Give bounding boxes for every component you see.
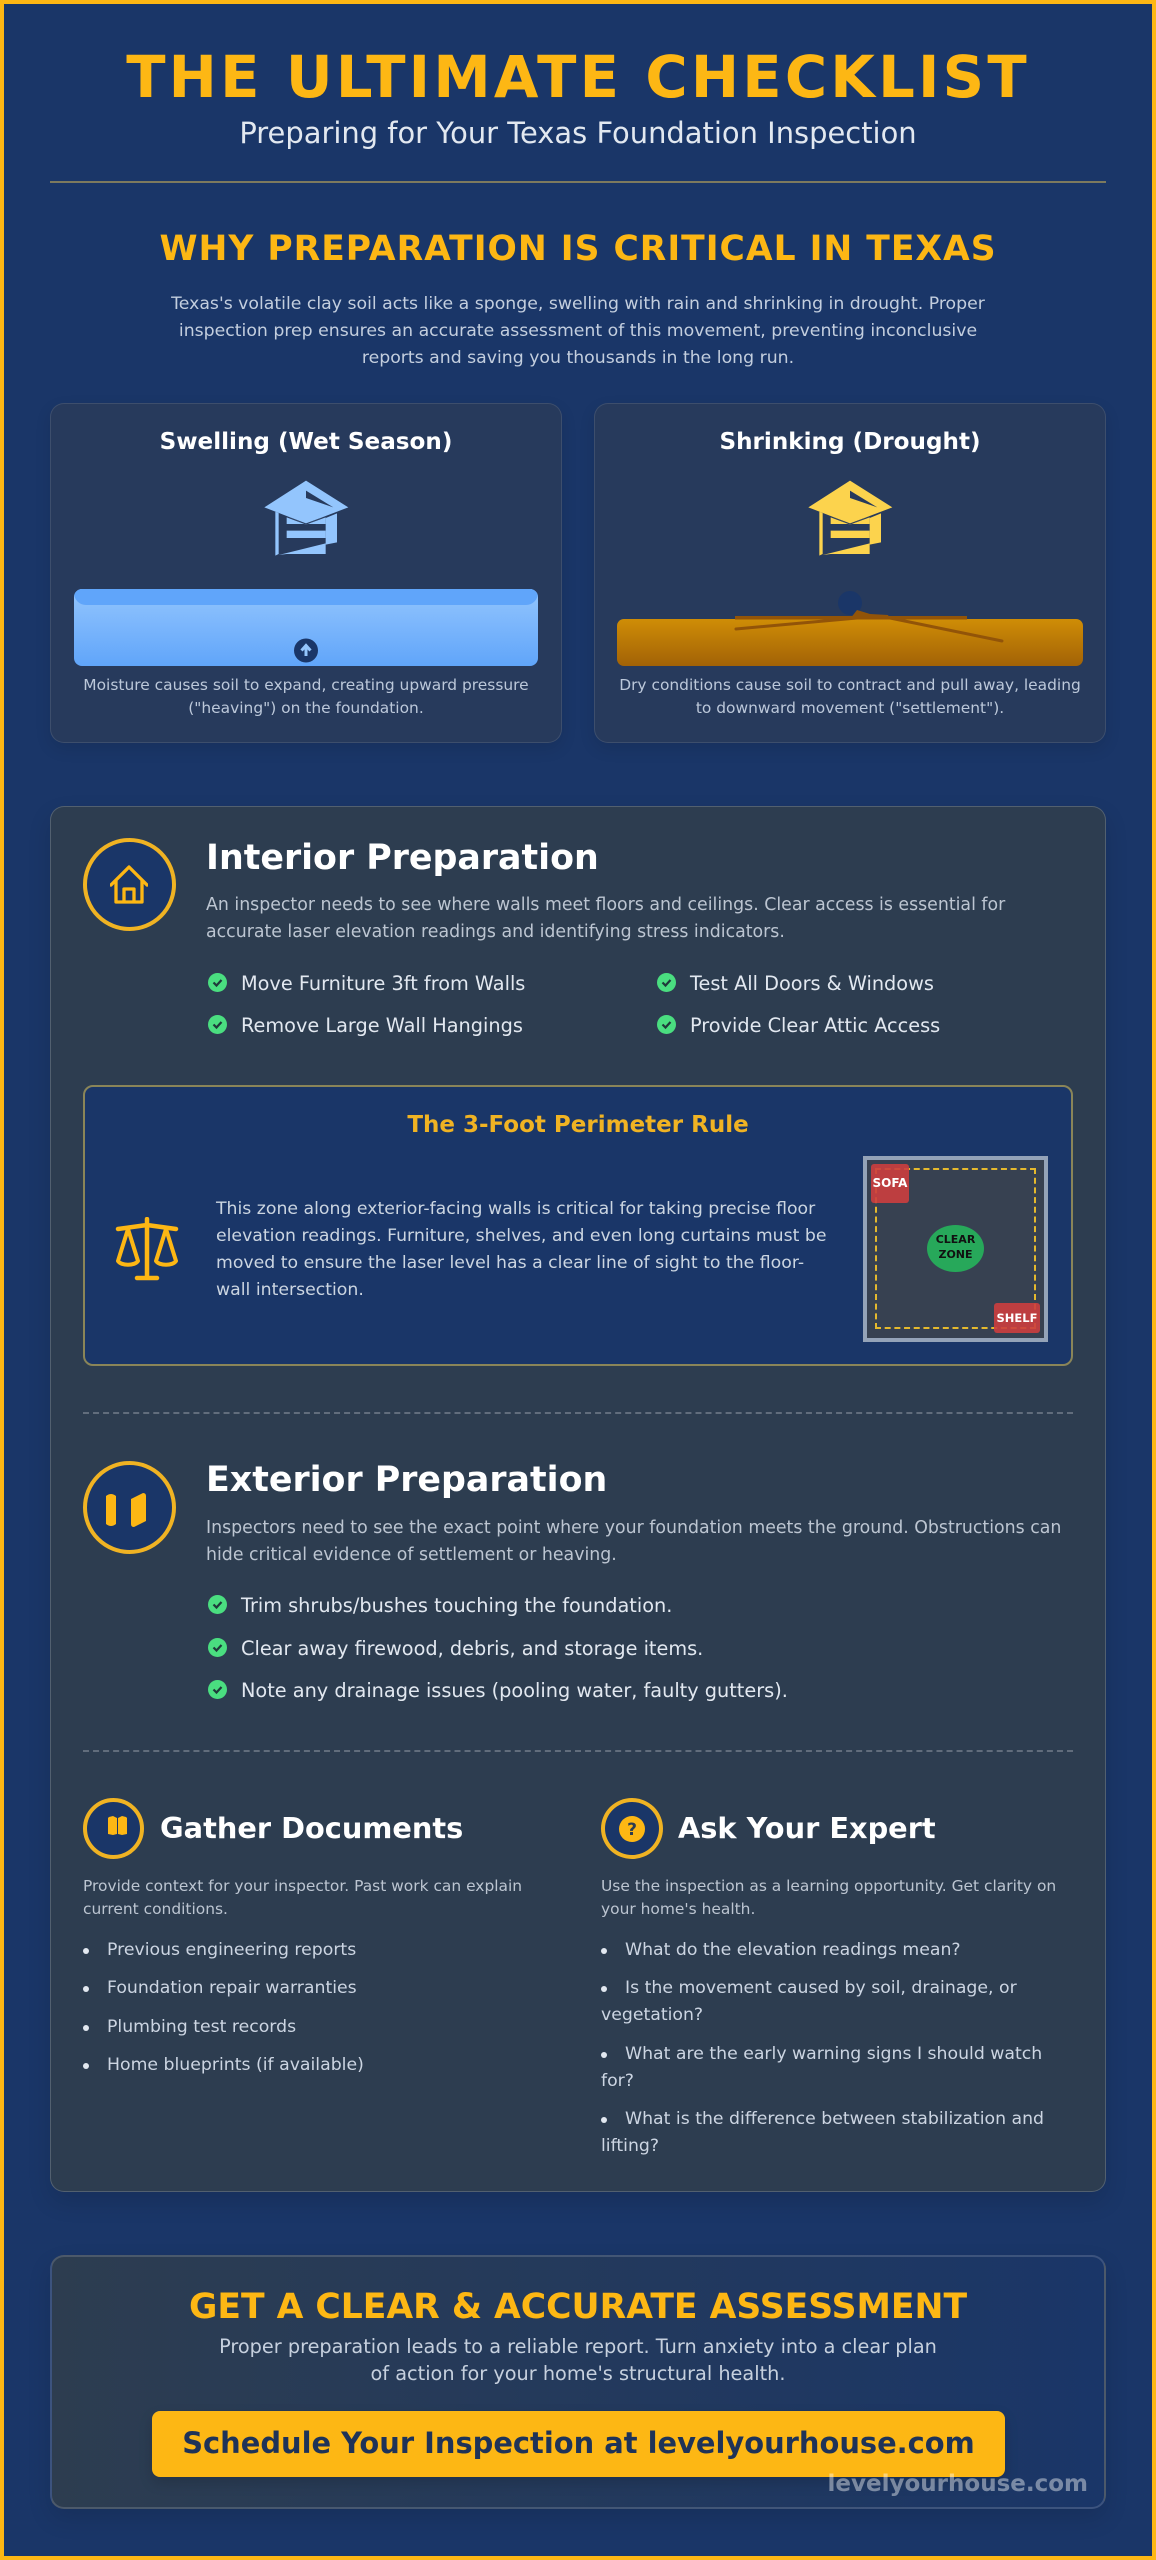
check item: Provide Clear Attic Access [690, 1014, 940, 1037]
intro paragraph [171, 294, 985, 368]
soil bar, dry with cracks [617, 591, 1083, 666]
icon: question [601, 1798, 663, 1859]
shrinking caption: Dry conditions cause soil to contract and pull away, leading [619, 676, 1081, 694]
swelling heading: Swelling (Wet Season) [160, 429, 452, 455]
rule description [216, 1199, 826, 1300]
rule description: moved to ensure the laser level has a clear line of sight to the floor- [216, 1253, 804, 1273]
watermark: levelyourhouse.com [828, 2471, 1088, 2497]
interior description: An inspector needs to see where walls meet floors and ceilings. Clear access is essential for [206, 895, 1005, 915]
cta paragraph: of action for your home's structural health. [370, 2362, 785, 2385]
icon: up arrow [294, 638, 318, 662]
intro paragraph: Texas's volatile clay soil acts like a sponge, swelling with rain and shrinking in drought. Proper [171, 294, 985, 314]
list item: Plumbing test records [107, 2017, 296, 2037]
swelling caption: ("heaving") on the foundation. [188, 699, 424, 717]
heading: gather documents: Gather Documents [160, 1811, 463, 1845]
list item: for? [601, 2071, 634, 2091]
shrinking caption [619, 676, 1081, 717]
icon: house, shrinking [808, 480, 892, 556]
clear zone [927, 1225, 984, 1272]
clear perimeter [875, 1168, 1036, 1329]
icon: exterior [83, 1461, 176, 1554]
list item [601, 1978, 1017, 2025]
documents description: current conditions. [83, 1900, 228, 1918]
icon: house, swelling [264, 480, 348, 556]
shrinking caption: to downward movement ("settlement"). [696, 699, 1004, 717]
list item [601, 2109, 1044, 2156]
header divider [50, 181, 1106, 183]
clear zone: ZONE [938, 1248, 973, 1261]
rule description: This zone along exterior-facing walls is critical for taking precise floor [216, 1199, 815, 1219]
exterior checklist [208, 1594, 788, 1702]
expert list [601, 1940, 1044, 2156]
panel: shrinking [594, 403, 1106, 743]
cta paragraph [219, 2335, 937, 2385]
list item: Home blueprints (if available) [107, 2055, 364, 2075]
icon: scales [116, 1217, 178, 1280]
swelling caption [83, 676, 529, 717]
interior checklist [208, 972, 940, 1037]
heading: exterior preparation: Exterior Preparation [206, 1460, 607, 1500]
list item: vegetation? [601, 2005, 703, 2025]
cta heading: GET A CLEAR & ACCURATE ASSESSMENT [189, 2287, 967, 2327]
expert description: your home's health. [601, 1900, 755, 1918]
documents description: Provide context for your inspector. Past work can explain [83, 1877, 522, 1895]
documents description [83, 1877, 522, 1918]
interior description [206, 895, 1006, 942]
check item: Clear away firewood, debris, and storage items. [241, 1637, 703, 1660]
rule heading: The 3-Foot Perimeter Rule [407, 1112, 749, 1138]
sofa [871, 1164, 909, 1203]
title: THE ULTIMATE CHECKLIST [126, 44, 1030, 111]
list item [601, 2044, 1042, 2091]
cta paragraph: Proper preparation leads to a reliable report. Turn anxiety into a clear plan [219, 2335, 937, 2358]
rule description: wall intersection. [216, 1280, 364, 1300]
exterior description: Inspectors need to see the exact point where your foundation meets the ground. Obstructions can [206, 1518, 1061, 1538]
sofa: SOFA [873, 1176, 907, 1190]
heading: ask your expert: Ask Your Expert [678, 1811, 936, 1845]
shelf [994, 1303, 1040, 1333]
cta button [152, 2411, 1005, 2477]
check item: Remove Large Wall Hangings [241, 1014, 523, 1037]
check item: Test All Doors & Windows [690, 972, 934, 995]
documents list [83, 1940, 364, 2075]
interior description: accurate laser elevation readings and identifying stress indicators. [206, 922, 785, 942]
panel: main preparation [50, 806, 1106, 2192]
subtitle: Preparing for Your Texas Foundation Inspection [239, 116, 917, 150]
check item: Trim shrubs/bushes touching the foundation. [241, 1594, 672, 1617]
rule description: elevation readings. Furniture, shelves, and even long curtains must be [216, 1226, 826, 1246]
panel: 3-foot perimeter rule [83, 1085, 1073, 1366]
panel: call to action [50, 2255, 1106, 2509]
icon: question: ? [627, 1820, 637, 1840]
shrinking heading: Shrinking (Drought) [719, 429, 981, 455]
heading: interior preparation: Interior Preparation [206, 838, 599, 878]
list item: What do the elevation readings mean? [625, 1940, 961, 1960]
icon: documents [83, 1798, 144, 1859]
cta button: Schedule Your Inspection at levelyourhouse.com [182, 2426, 975, 2460]
list item: Is the movement caused by soil, drainage, or [625, 1978, 1017, 1998]
list item: Foundation repair warranties [107, 1978, 357, 1998]
list item: What is the difference between stabilization and [625, 2109, 1044, 2129]
expert description [601, 1877, 1056, 1918]
heading: why preparation: WHY PREPARATION IS CRITICAL IN TEXAS [159, 229, 997, 269]
shelf: SHELF [997, 1311, 1037, 1325]
expert description: Use the inspection as a learning opportunity. Get clarity on [601, 1877, 1056, 1895]
diagram: room floor plan [863, 1156, 1048, 1342]
intro paragraph: reports and saving you thousands in the long run. [362, 348, 794, 368]
list item: What are the early warning signs I should watch [625, 2044, 1042, 2064]
exterior description [206, 1518, 1061, 1565]
panel: swelling [50, 403, 562, 743]
list item: lifting? [601, 2136, 659, 2156]
clear zone: CLEAR [936, 1233, 975, 1246]
exterior description: hide critical evidence of settlement or heaving. [206, 1545, 617, 1565]
check item: Move Furniture 3ft from Walls [241, 972, 525, 995]
check item: Note any drainage issues (pooling water, faulty gutters). [241, 1679, 788, 1702]
intro paragraph: inspection prep ensures an accurate assessment of this movement, preventing inconclusive [179, 321, 977, 341]
soil bar, wet [74, 589, 538, 666]
icon: interior house [83, 838, 176, 931]
swelling caption: Moisture causes soil to expand, creating upward pressure [83, 676, 529, 694]
list item: Previous engineering reports [107, 1940, 356, 1960]
